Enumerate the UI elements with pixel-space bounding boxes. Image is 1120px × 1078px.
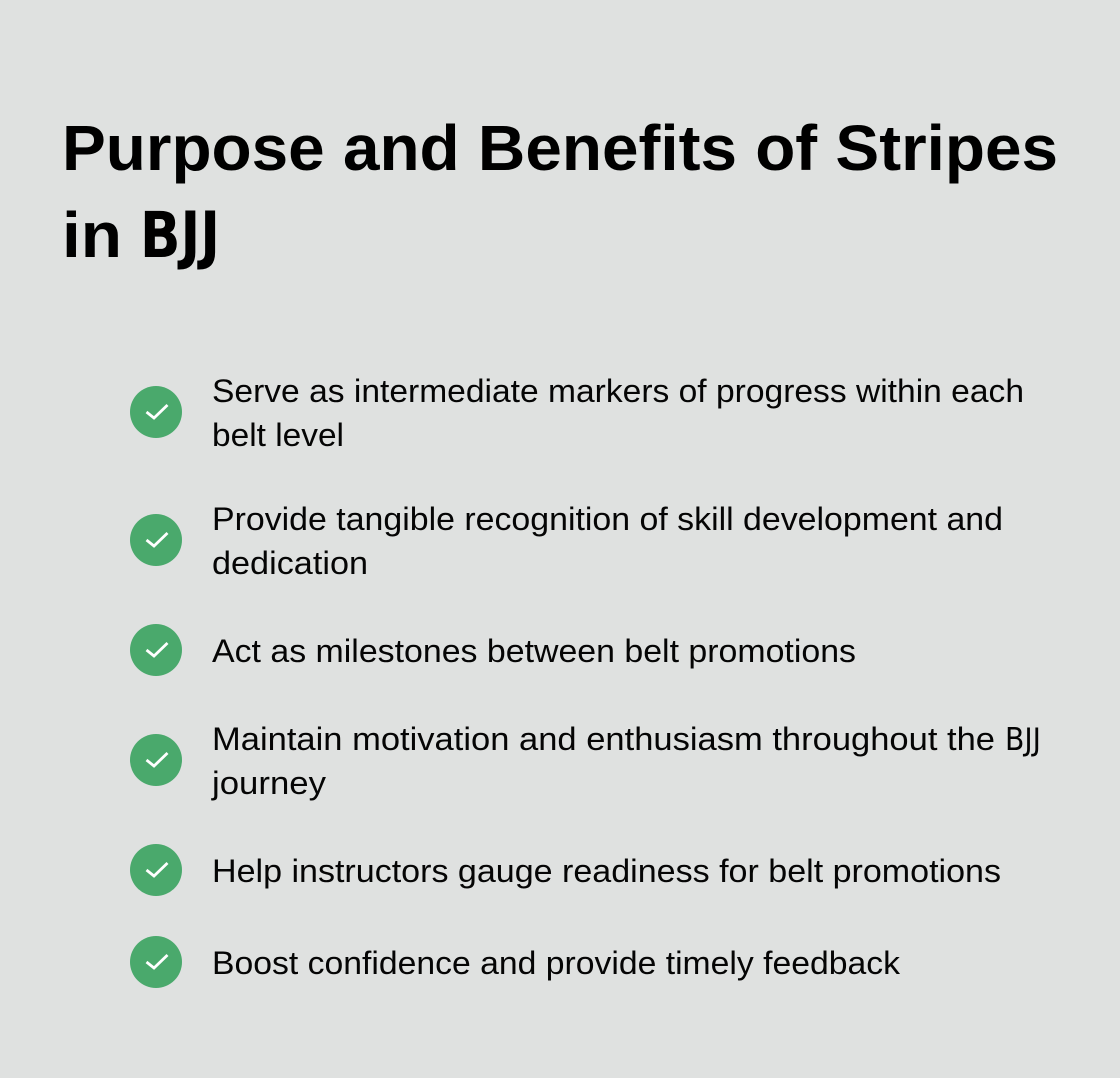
item 4 — [130, 721, 1041, 801]
title: Purpose and Benefits of Stripes — [62, 112, 1058, 184]
title: BJJ — [140, 199, 220, 272]
text: item 1 — [212, 373, 1024, 453]
text: item 2: dedication — [212, 545, 368, 581]
text: item 1: belt level — [212, 417, 344, 453]
text: item 2: Provide tangible recognition of skill development and — [212, 501, 1003, 537]
text: item 3: Act as milestones between belt promotions — [212, 633, 856, 669]
text: item 1: Serve as intermediate markers of progress within each — [212, 373, 1024, 409]
icon: check 4 — [130, 734, 182, 786]
text: item 6: Boost confidence and provide timely feedback — [212, 945, 901, 981]
text: item 4: journey — [211, 765, 327, 801]
icon: check 3 — [130, 624, 182, 676]
icon: check 2 — [130, 514, 182, 566]
title — [62, 112, 1058, 272]
icon: check 5 — [130, 844, 182, 896]
checklist — [130, 373, 1041, 988]
title: in — [62, 199, 122, 271]
text: item 5: Help instructors gauge readiness for belt promotions — [212, 853, 1001, 889]
item 1 — [130, 373, 1024, 453]
icon: check 1 — [130, 386, 182, 438]
text: item 2 — [212, 501, 1003, 581]
text: item 4: BJJ — [1005, 722, 1041, 758]
text: item 4 — [211, 721, 1041, 801]
item 3 — [130, 624, 856, 676]
item 6 — [130, 936, 901, 988]
icon: check 6 — [130, 936, 182, 988]
item 2 — [130, 501, 1003, 581]
text: item 4: Maintain motivation and enthusiasm throughout the — [212, 721, 995, 757]
item 5 — [130, 844, 1001, 896]
